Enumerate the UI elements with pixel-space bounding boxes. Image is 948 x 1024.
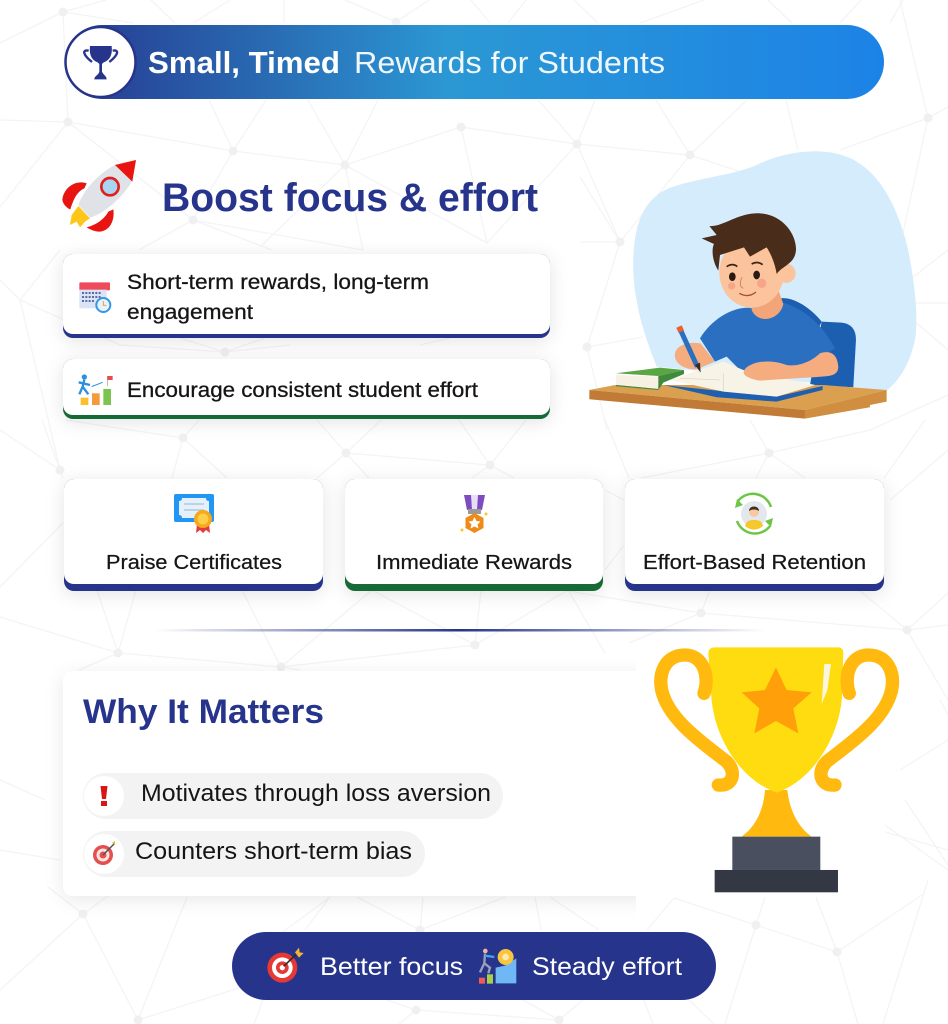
title (148, 45, 665, 80)
pill: short-term bias: Counters short-term bias (135, 838, 412, 865)
icon: climbing effort (479, 949, 516, 984)
panel: why it matters (63, 671, 663, 896)
pill: loss aversion: Motivates through loss aversion (141, 780, 491, 807)
icon: medal (460, 495, 488, 533)
text: Better focus (320, 953, 463, 981)
panel: short-term rewards card (63, 254, 550, 338)
text: Steady effort (532, 953, 682, 981)
text: Short-term rewards, long-term (127, 270, 429, 294)
illustration: boy studying at desk (589, 151, 916, 419)
icon: climbing bars (79, 374, 113, 405)
icon: trophy badge (66, 27, 136, 97)
heading: Why It Matters (83, 693, 324, 731)
icon: target (267, 948, 304, 983)
pill: short-term bias (83, 831, 425, 877)
label: Immediate Rewards (376, 552, 572, 574)
text: Encourage consistent student effort (127, 378, 478, 402)
text: engagement (127, 300, 253, 324)
icon: rocket (62, 160, 136, 232)
title: Small, Timed (148, 45, 340, 80)
header banner (65, 25, 884, 99)
heading: boost focus and effort: Boost focus & effort (162, 176, 538, 220)
illustration: gold trophy (636, 647, 900, 897)
icon: calendar with clock (79, 282, 110, 312)
label: Effort-Based Retention (643, 552, 866, 574)
text (127, 270, 429, 324)
panel: immediate rewards card (345, 479, 603, 591)
panel: praise certificates card (64, 479, 323, 591)
icon: certificate (174, 494, 214, 533)
label: Praise Certificates (106, 552, 282, 574)
icon: person with cycle arrows (735, 494, 773, 534)
bottom banner (232, 932, 716, 1000)
panel: consistent effort card (63, 359, 550, 419)
panel: effort-based retention card (625, 479, 884, 591)
pill: loss aversion (83, 773, 503, 819)
title: Rewards for Students (354, 45, 665, 80)
